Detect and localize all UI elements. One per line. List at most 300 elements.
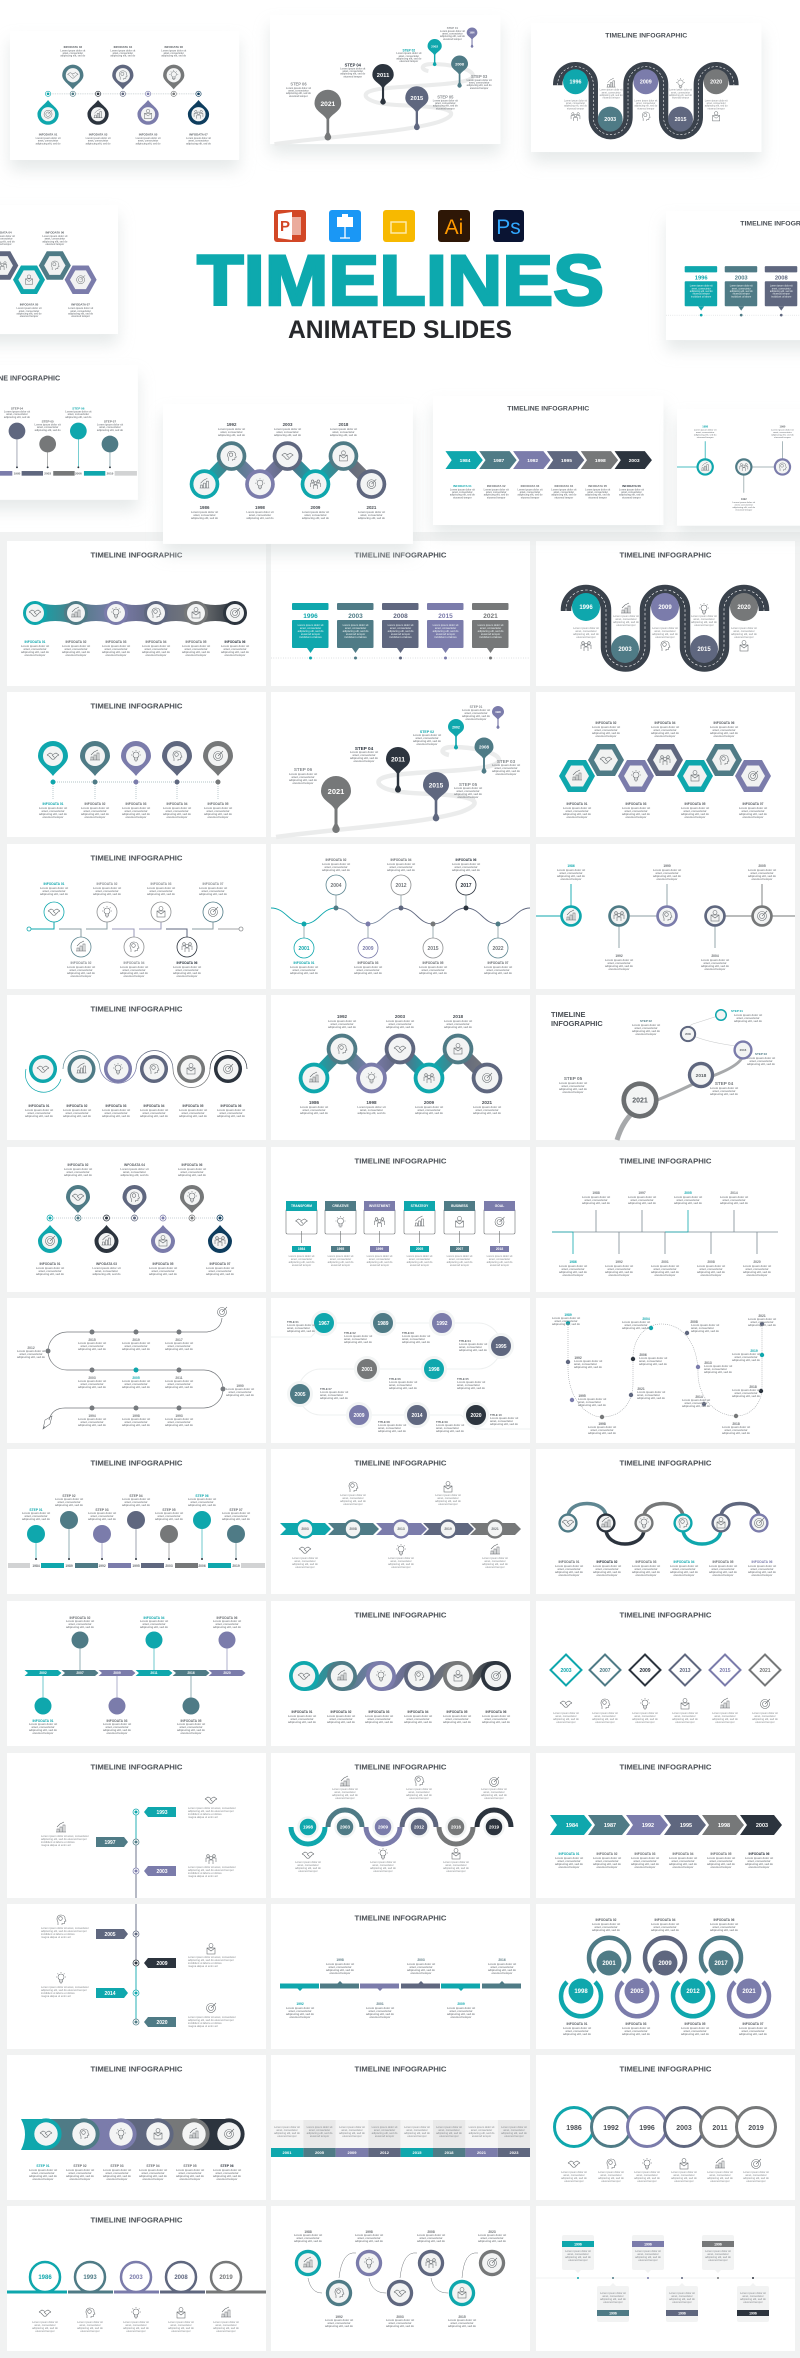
years xyxy=(38,2275,233,2281)
captions: INFODATA 03 xyxy=(357,961,379,965)
slide: hexagons xyxy=(536,692,795,837)
captions: INFODATA 06 xyxy=(751,1560,773,1564)
years: 2009 xyxy=(353,1413,365,1419)
captions xyxy=(39,802,232,819)
icon: Photoshop xyxy=(493,210,524,242)
captions: STEP 02 xyxy=(62,1494,76,1498)
captions: INFODATA 07 xyxy=(202,882,224,886)
open rings xyxy=(561,1938,769,2016)
slide: serpentine path with rocket xyxy=(7,1298,266,1443)
captions xyxy=(552,1313,776,1435)
title xyxy=(354,1458,447,1468)
captions: INFODATA 03 xyxy=(150,882,172,886)
main title: TIMELINES xyxy=(197,242,604,321)
captions: INFODATA 01 xyxy=(28,1104,50,1108)
captions: 2018 xyxy=(453,1014,464,1019)
captions: INFODATA 06 xyxy=(485,1710,507,1714)
years: 2009 xyxy=(362,946,374,952)
slide: axis timeline xyxy=(536,1147,795,1292)
nodes xyxy=(47,1215,223,1221)
captions: 2019 xyxy=(132,1338,140,1342)
boxes xyxy=(292,603,508,660)
notes: TITLE 02 xyxy=(344,1331,356,1335)
arrow band xyxy=(24,1670,246,1676)
slide: arrow band with lollipops xyxy=(7,1601,266,1746)
captions: 2006 xyxy=(639,1353,647,1357)
years: 1992 xyxy=(436,1321,448,1327)
title xyxy=(620,2064,712,2074)
card headers xyxy=(286,1201,515,1211)
captions: 2015 xyxy=(88,1338,96,1342)
card headers: GOAL xyxy=(495,1204,504,1208)
captions: STEP 04 xyxy=(146,2164,160,2168)
captions: INFODATA 04 xyxy=(166,802,188,806)
nodes xyxy=(133,1931,139,2025)
year band: 2015 xyxy=(413,2150,422,2155)
band: 2006 xyxy=(198,1564,206,1568)
slide: rings on baseline xyxy=(7,2206,266,2351)
icon: Google Slides xyxy=(383,210,415,242)
rings: 2009 xyxy=(685,1032,691,1036)
diamonds: 2009 xyxy=(639,1668,651,1674)
captions xyxy=(555,1852,773,1869)
rings: 2016 xyxy=(740,1048,747,1052)
subtitle: ANIMATED SLIDES xyxy=(288,316,512,344)
years: 2003 xyxy=(340,1824,351,1830)
band: 1995 xyxy=(132,1564,140,1568)
note cards xyxy=(562,2235,769,2322)
captions: INFODATA 04 xyxy=(123,961,145,965)
captions: 1993 xyxy=(175,1414,183,1418)
hero slide: pins and dotted line xyxy=(10,31,239,170)
captions: STEP 01 xyxy=(29,1508,43,1512)
title xyxy=(620,1762,712,1772)
lollipops xyxy=(34,1632,236,1714)
icons and notes xyxy=(561,2158,769,2183)
card icons xyxy=(296,1216,504,1227)
vertical line lower xyxy=(135,1964,137,2022)
captions: 2008 xyxy=(427,2230,435,2234)
slide: interlocked rings xyxy=(536,1904,795,2049)
captions: INFODATA 02 xyxy=(330,1710,352,1714)
slide: rising road with rings xyxy=(536,995,795,1140)
hero slide: boxes xyxy=(666,211,800,350)
slide: dotted snake xyxy=(536,1298,795,1443)
band: 1989 xyxy=(65,1564,73,1568)
diamonds: 2021 xyxy=(759,1668,771,1674)
captions: INFODATA 03 xyxy=(106,1719,128,1723)
captions: INFODATA 01 xyxy=(39,1262,61,1266)
rings: 2008 xyxy=(349,1527,357,1531)
icon: Photoshop: Ps xyxy=(496,216,521,239)
icons and notes xyxy=(32,2307,239,2333)
captions: INFODATA 01 xyxy=(24,640,46,644)
pins: 1996 xyxy=(495,711,501,714)
notes: TITLE 05 xyxy=(457,1377,469,1381)
pins: 2021 xyxy=(328,787,344,796)
slide: steps with pins on band xyxy=(7,1449,266,1594)
card outlines xyxy=(286,1209,515,1243)
captions: 1998 xyxy=(366,1100,377,1105)
captions: INFODATA 04 xyxy=(407,1710,429,1714)
years: 2015 xyxy=(438,613,453,620)
years: 1986 xyxy=(38,2275,52,2281)
captions xyxy=(563,721,767,819)
captions: INFODATA 07 xyxy=(742,2022,764,2026)
captions: INFODATA 04 xyxy=(672,1852,694,1856)
step notes: STEP 01 xyxy=(470,705,483,709)
captions: INFODATA 01 xyxy=(293,961,315,965)
diamonds: 2007 xyxy=(599,1668,611,1674)
captions: INFODATA 06 xyxy=(713,721,735,725)
captions: INFODATA 04 xyxy=(124,1163,145,1167)
year headers xyxy=(562,2241,769,2316)
captions: 1988 xyxy=(304,2230,312,2234)
captions: 1988 xyxy=(592,1191,600,1195)
year band: 2018 xyxy=(445,2150,454,2155)
slide: connected arcs xyxy=(536,1449,795,1594)
captions xyxy=(29,1616,241,1735)
title xyxy=(620,1610,712,1620)
captions: INFODATA 02 xyxy=(67,1163,89,1167)
captions: INFODATA 05 xyxy=(446,1710,468,1714)
captions: 1986 xyxy=(567,864,575,868)
captions xyxy=(40,882,227,978)
captions xyxy=(36,1163,234,1276)
captions: INFODATA 03 xyxy=(105,1104,127,1108)
years: 2022 xyxy=(492,946,504,952)
captions: 1989 xyxy=(564,1313,572,1317)
slide: rings with arcs xyxy=(7,995,266,1140)
years: 1995 xyxy=(495,1344,507,1350)
stems and circles xyxy=(294,875,508,958)
slide: zigzag blobs xyxy=(271,995,530,1140)
discs: 2021 xyxy=(742,1989,756,1995)
baseline xyxy=(7,2290,266,2294)
year headers: 1996 xyxy=(644,2242,652,2246)
road xyxy=(617,1015,743,1140)
captions: INFODATA 04 xyxy=(143,1616,165,1620)
arrow band: 2002 xyxy=(39,1671,47,1675)
captions: 1986 xyxy=(309,1100,320,1105)
icons and notes xyxy=(553,1698,778,1724)
title xyxy=(90,2216,183,2224)
rings xyxy=(558,1513,769,1533)
title xyxy=(551,1010,603,1028)
year circles: 1996 xyxy=(579,605,593,611)
years: 2014 xyxy=(411,1413,423,1419)
discs: 2009 xyxy=(658,1961,672,1967)
years: 1998 xyxy=(303,1824,314,1830)
years xyxy=(566,2125,764,2132)
captions: INFODATA 03 xyxy=(634,1852,656,1856)
curved arrows xyxy=(308,2253,478,2293)
hero slide: chevrons xyxy=(433,396,664,535)
step notes: STEP 05 xyxy=(564,1076,583,1081)
icon: Illustrator xyxy=(438,210,470,242)
title xyxy=(354,1914,447,1922)
captions: 2005 xyxy=(684,1191,692,1195)
title xyxy=(90,1762,183,1772)
title: TIMELINE xyxy=(551,1010,586,1019)
year tags: 1993 xyxy=(156,1810,168,1816)
years: 2017 xyxy=(460,883,472,889)
slide: half arcs with discs xyxy=(271,1753,530,1898)
year tags: 2014 xyxy=(104,1991,116,1997)
captions: 1986 xyxy=(569,1260,577,1264)
captions xyxy=(286,1958,516,2019)
card headers: BUSINESS xyxy=(451,1204,469,1208)
year tags: 1999 xyxy=(376,1247,383,1251)
chevrons xyxy=(280,1523,521,1535)
icons: target and rocket xyxy=(43,1307,227,1429)
chain xyxy=(23,601,247,625)
chevrons: 1984 xyxy=(566,1823,579,1829)
captions: INFODATA 05 xyxy=(180,1719,202,1723)
years: 1996 xyxy=(639,2125,655,2132)
slide: staggered rings with arrows xyxy=(271,2206,530,2351)
years: 2019 xyxy=(748,2125,764,2132)
chevrons: 1995 xyxy=(680,1823,692,1829)
captions: INFODATA 03 xyxy=(368,1710,390,1714)
captions: INFODATA 02 xyxy=(65,640,87,644)
vertical line lower xyxy=(135,1842,137,1898)
captions: INFODATA 05 xyxy=(207,802,229,806)
years: 1993 xyxy=(83,2275,97,2281)
captions: INFODATA 07 xyxy=(209,1262,231,1266)
captions: 1992 xyxy=(296,2002,304,2006)
icons and notes xyxy=(41,1915,236,2028)
icons and notes xyxy=(41,1797,236,1878)
year band: 2023 xyxy=(510,2150,519,2155)
years: 2012 xyxy=(395,883,407,889)
road xyxy=(276,747,499,837)
notes: TITLE 10 xyxy=(490,1413,502,1417)
years: 1996 xyxy=(303,613,318,620)
vertical line xyxy=(135,1904,137,1964)
years: 2004 xyxy=(330,883,342,889)
pins xyxy=(27,1511,245,1560)
chevrons: 1987 xyxy=(604,1823,616,1829)
icon: PowerPoint xyxy=(274,210,306,242)
chevrons xyxy=(550,1815,782,1835)
icon: PowerPoint: P xyxy=(280,218,290,235)
year circles: 2020 xyxy=(737,605,751,611)
slide: chevron band with rings xyxy=(271,1449,530,1594)
captions xyxy=(29,2164,241,2181)
captions: 2021 xyxy=(758,1314,766,1318)
years: 2019 xyxy=(489,1824,500,1830)
title xyxy=(354,1762,447,1772)
years: 2011 xyxy=(712,2125,728,2132)
hero slide: steps on band xyxy=(0,365,138,510)
captions: 2008 xyxy=(690,1320,698,1324)
years: 1986 xyxy=(566,2125,582,2132)
captions: INFODATA 01 xyxy=(291,1710,313,1714)
step notes: STEP 03 xyxy=(497,759,516,764)
pins: 2002 xyxy=(452,726,460,730)
discs xyxy=(568,1950,762,2004)
captions: INFODATA 01 xyxy=(32,1719,54,1723)
year band: 2009 xyxy=(348,2150,357,2155)
captions: STEP 03 xyxy=(95,1508,109,1512)
captions: INFODATA 01 xyxy=(558,1852,580,1856)
captions: 2005 xyxy=(132,1376,140,1380)
app icons xyxy=(274,210,524,242)
captions: INFODATA 04 xyxy=(654,1918,676,1922)
dotted line xyxy=(50,1217,220,1219)
notes: TITLE 01 xyxy=(287,1320,299,1324)
year band: 2021 xyxy=(477,2150,487,2155)
circles and icons xyxy=(27,902,243,957)
captions: 1994 xyxy=(88,1414,96,1418)
title xyxy=(90,702,183,710)
card headers: INVESTMENT xyxy=(369,1204,390,1208)
step notes: STEP 04 xyxy=(355,746,374,751)
captions: STEP 05 xyxy=(162,1508,176,1512)
captions: INFODATA 02 xyxy=(66,1104,88,1108)
year circles xyxy=(572,593,758,663)
years: 1992 xyxy=(603,2125,619,2132)
captions: STEP 04 xyxy=(129,1494,143,1498)
captions xyxy=(559,1191,771,1277)
years: 1967 xyxy=(318,1321,330,1327)
captions: 1992 xyxy=(337,1014,348,1019)
captions: INFODATA 05 xyxy=(152,1262,174,1266)
captions: STEP 05 xyxy=(183,2164,197,2168)
step notes: STEP 02 xyxy=(640,1019,652,1023)
title xyxy=(620,550,712,560)
slide: year boxes xyxy=(271,541,530,686)
discs: 2012 xyxy=(686,1989,700,1995)
year headers: 1996 xyxy=(749,2311,757,2315)
rings: 2021 xyxy=(632,1098,648,1104)
notes: TITLE 06 xyxy=(389,1377,401,1381)
card headers: STRATEGY xyxy=(411,1204,429,1208)
pins xyxy=(38,741,233,784)
captions: INFODATA 02 xyxy=(325,858,347,862)
rings: 2021 xyxy=(491,1527,499,1531)
years xyxy=(298,883,504,952)
slide: twisted ribbon xyxy=(271,1601,530,1746)
step notes: STEP 05 xyxy=(459,782,478,787)
captions: INFODATA 06 xyxy=(216,1616,238,1620)
slide: steps road with pins xyxy=(271,692,530,837)
step notes: STEP 06 xyxy=(294,767,313,772)
discs: 2005 xyxy=(630,1989,644,1995)
hero slide: road xyxy=(531,23,762,162)
pins: 2008 xyxy=(479,744,490,750)
year circles: 2015 xyxy=(697,647,711,653)
year tags: 1995 xyxy=(337,1247,344,1251)
captions: INFODATA 03 xyxy=(635,1560,657,1564)
slide: staggered note cards xyxy=(536,2206,795,2351)
captions: INFODATA 02 xyxy=(595,1918,617,1922)
dotted path xyxy=(568,1323,762,1417)
slide: columns on a year band xyxy=(271,2055,530,2200)
captions: 2003 xyxy=(396,2315,404,2319)
slide: map pins row xyxy=(7,692,266,837)
arrow band: 2007 xyxy=(76,1671,84,1675)
captions xyxy=(555,1560,776,1577)
step notes xyxy=(289,705,520,799)
dotted line xyxy=(271,657,530,659)
card headers: CREATIVE xyxy=(332,1204,350,1208)
slide: road timeline xyxy=(536,541,795,686)
captions: 2004 xyxy=(711,954,719,958)
year circles: 2009 xyxy=(658,605,672,611)
captions: INFODATA 04 xyxy=(390,858,412,862)
captions: INFODATA 05 xyxy=(710,1852,732,1856)
captions: INFODATA 05 xyxy=(684,802,706,806)
rings xyxy=(621,1009,753,1119)
title xyxy=(620,1156,712,1166)
captions: INFODATA 01 xyxy=(566,802,588,806)
years: 2020 xyxy=(470,1413,482,1419)
diamonds xyxy=(550,1654,780,1686)
notes: TITLE 07 xyxy=(320,1387,332,1391)
notes: TITLE 04 xyxy=(459,1339,471,1343)
captions: INFODATA 02 xyxy=(69,1616,91,1620)
arrow band: 2009 xyxy=(113,1671,121,1675)
year tags: 2007 xyxy=(456,1247,463,1251)
captions: 1998 xyxy=(598,1422,606,1426)
title xyxy=(90,2064,183,2074)
captions: 2011 xyxy=(175,1376,183,1380)
years xyxy=(303,613,498,620)
hexagon chain xyxy=(559,744,771,792)
captions: INFODATA 02 xyxy=(70,961,92,965)
rings xyxy=(554,2108,776,2146)
captions: INFODATA 01 xyxy=(558,1560,580,1564)
captions: INFODATA 05 xyxy=(712,1560,734,1564)
slide: category cards xyxy=(271,1147,530,1292)
captions: 1998 xyxy=(365,2230,373,2234)
captions xyxy=(22,1494,250,1521)
notes: TITLE 09 xyxy=(436,1420,448,1424)
ribbon xyxy=(304,1665,496,1687)
path xyxy=(48,1318,223,1420)
captions: STEP 06 xyxy=(195,1494,209,1498)
captions: INFODATA 02 xyxy=(596,1852,618,1856)
path xyxy=(271,1323,530,1429)
chevrons: 1998 xyxy=(718,1823,730,1829)
captions: 2018 xyxy=(749,1385,757,1389)
title xyxy=(90,854,183,862)
captions: INFODATA 03 xyxy=(96,1262,117,1266)
year band xyxy=(271,2148,530,2157)
pins: 2015 xyxy=(429,782,444,790)
captions xyxy=(294,2230,506,2328)
nodes xyxy=(560,905,773,927)
axis xyxy=(536,2277,795,2279)
slide: diamonds xyxy=(536,1601,795,1746)
pins xyxy=(321,706,504,833)
icon: Keynote xyxy=(329,210,361,242)
title xyxy=(620,1458,712,1468)
years: 2001 xyxy=(298,946,310,952)
captions: 2019 xyxy=(750,1349,758,1353)
dotted connector xyxy=(53,782,218,800)
captions: INFODATA 01 xyxy=(566,2022,588,2026)
captions: 2015 xyxy=(458,2315,466,2319)
captions: 2009 xyxy=(457,2002,465,2006)
captions: 1990 xyxy=(236,1384,244,1388)
captions: INFODATA 05 xyxy=(185,640,207,644)
captions: 1995 xyxy=(578,1394,586,1398)
captions: INFODATA 02 xyxy=(596,1560,618,1564)
captions: 2003 xyxy=(395,1014,406,1019)
